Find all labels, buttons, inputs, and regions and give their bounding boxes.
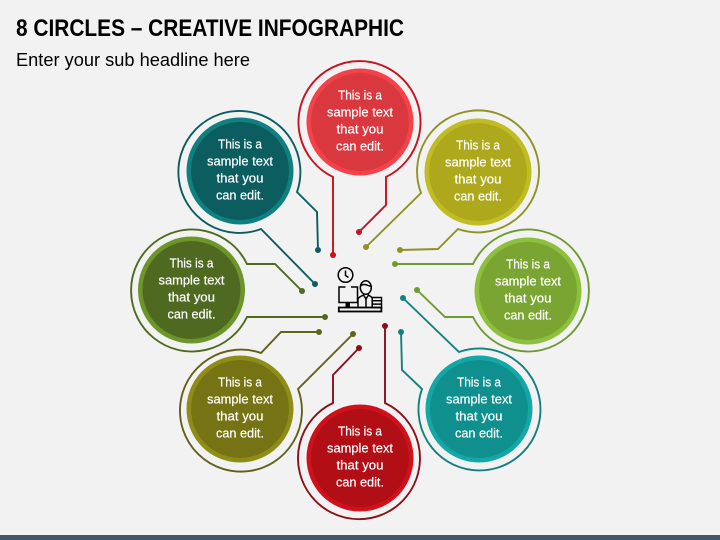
panel: olive circle: can edit.: [216, 426, 264, 440]
panel: bottom dark red circle: sample text: [327, 440, 393, 456]
panel: teal circle: sample text: [446, 392, 512, 406]
panel: olive circle: This is a: [218, 374, 263, 390]
panel: teal circle: This is a: [457, 374, 502, 390]
panel: top red circle: that you: [336, 122, 384, 136]
panel: bottom dark red circle: This is a: [338, 424, 383, 438]
footer bar: [0, 535, 720, 540]
panel: olive circle: sample text: [207, 392, 273, 406]
title: 8 CIRCLES – CREATIVE INFOGRAPHIC: [16, 15, 404, 42]
panel: dark green circle: This is a: [170, 256, 214, 270]
panel: light green circle: This is a: [506, 256, 551, 272]
icon: person at desk with clock: [338, 268, 382, 312]
panel: dark teal circle: that you: [216, 170, 264, 186]
panel: olive circle: [180, 329, 356, 472]
panel: bottom dark red circle: that you: [336, 458, 384, 472]
panel: teal circle: that you: [456, 408, 502, 424]
panel: yellow circle: that you: [454, 172, 502, 186]
panel: yellow circle: This is a: [456, 138, 501, 152]
panel: yellow circle: sample text: [445, 154, 511, 170]
panel: dark green circle: [131, 229, 328, 352]
subtitle: Enter your sub headline here: [16, 50, 250, 70]
panel: top red circle: This is a: [338, 88, 383, 102]
panel: teal circle: can edit.: [455, 426, 503, 440]
panel: dark green circle: can edit.: [168, 306, 216, 322]
panel: dark teal circle: [178, 111, 321, 287]
panel: light green circle: can edit.: [504, 308, 552, 322]
panel: dark teal circle: sample text: [207, 154, 273, 168]
panel: top red circle: can edit.: [336, 138, 384, 154]
panel: yellow circle: [363, 110, 539, 253]
panel: bottom dark red circle: [298, 323, 420, 519]
panel: top red circle: sample text: [327, 104, 393, 120]
panel: top red circle: [298, 61, 420, 258]
panel: dark teal circle: can edit.: [216, 188, 264, 202]
panel: light green circle: [392, 229, 589, 352]
panel: light green circle: sample text: [495, 274, 561, 288]
panel: yellow circle: can edit.: [454, 188, 502, 204]
panel: bottom dark red circle: can edit.: [336, 474, 384, 490]
panel: dark green circle: sample text: [158, 272, 225, 288]
panel: olive circle: that you: [216, 408, 264, 424]
panel: light green circle: that you: [504, 290, 552, 306]
panel: dark green circle: that you: [168, 290, 215, 304]
panel: dark teal circle: This is a: [218, 136, 263, 152]
panel: teal circle: [398, 295, 540, 470]
